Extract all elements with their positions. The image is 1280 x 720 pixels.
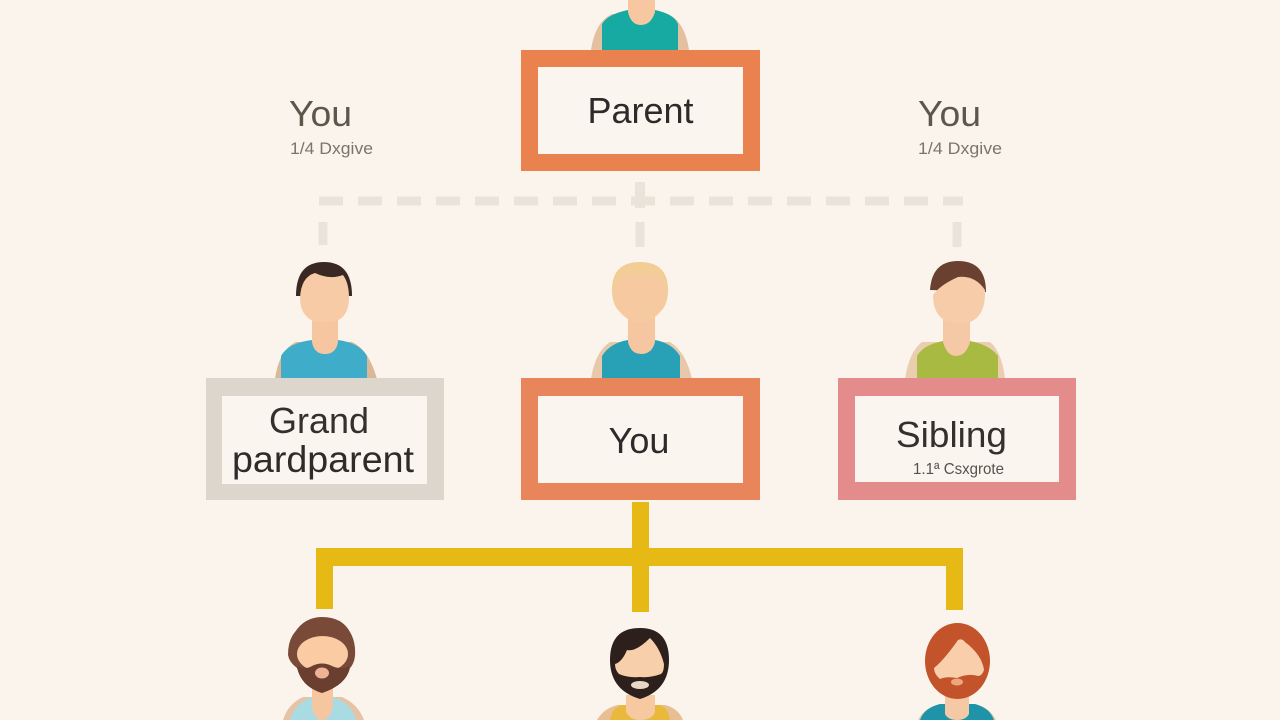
label: You (right): You [918, 93, 981, 134]
person: child right [918, 623, 996, 720]
box: Parent [521, 50, 760, 171]
label: You (right): 1/4 Dxgive [918, 139, 1002, 158]
dashed connector: parent to second row [319, 182, 963, 247]
box: Parent: Parent [587, 90, 694, 131]
yellow connector: you to children [316, 502, 963, 612]
person: you [591, 262, 692, 379]
box: Grandparent [206, 378, 444, 500]
person: grandparent [275, 262, 377, 379]
box: Grandparent: Grand [269, 400, 369, 441]
label: You (left): You [289, 93, 352, 134]
person: child centre [597, 628, 683, 720]
label: You (left) [289, 93, 373, 158]
person: parent (top, cropped) [591, 0, 689, 50]
box: You: You [609, 420, 669, 461]
box: Sibling: Sibling [896, 414, 1007, 455]
label: You (right) [918, 93, 1002, 158]
person: child left [283, 617, 364, 720]
person: sibling [905, 261, 1005, 379]
box: Grandparent: pardparent [232, 439, 415, 480]
label: You (left): 1/4 Dxgive [290, 139, 373, 158]
box: You [521, 378, 760, 500]
box: Sibling [838, 378, 1076, 500]
box: Sibling: 1.1ª Csxgrote [913, 461, 1004, 478]
